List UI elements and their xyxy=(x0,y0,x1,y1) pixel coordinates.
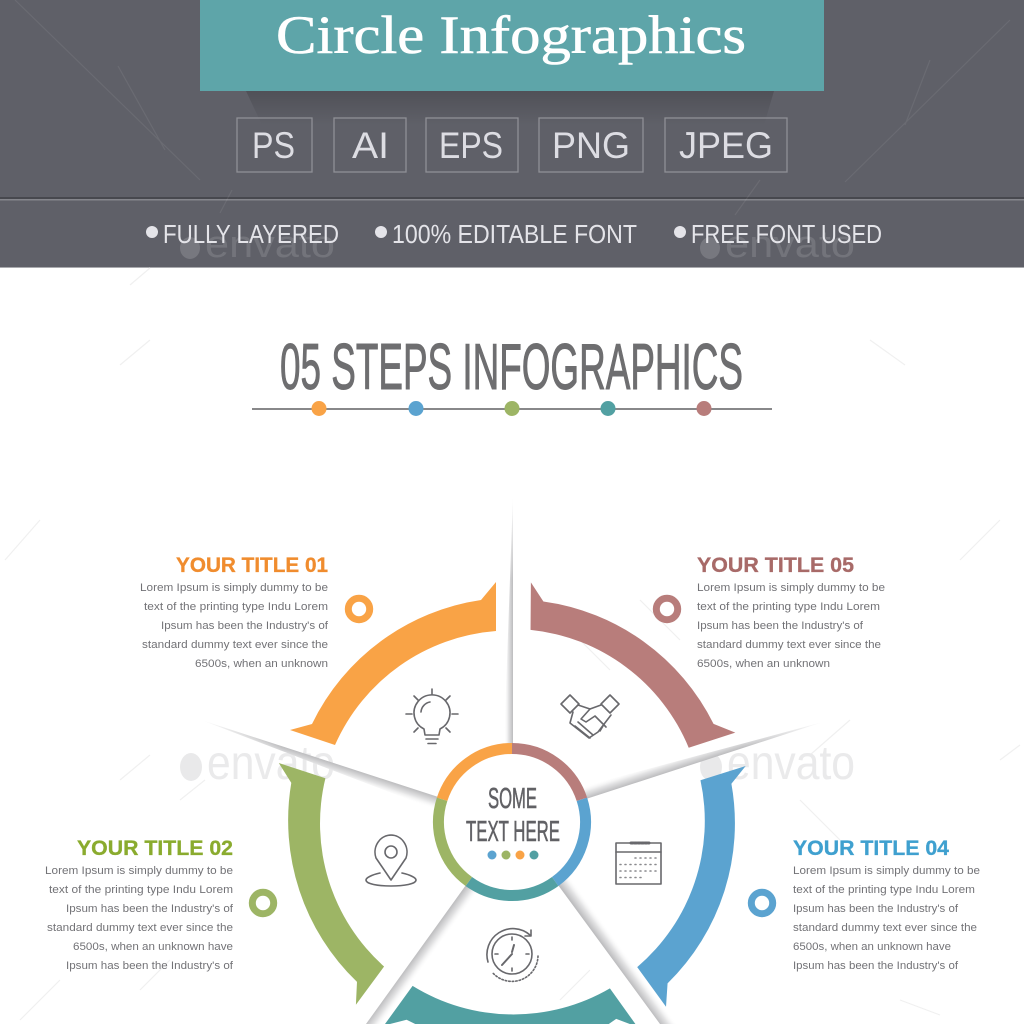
watermark: envato left: envato xyxy=(207,737,335,790)
header background xyxy=(0,0,1024,268)
body 01: Ipsum has been the Industry's of xyxy=(161,620,329,632)
body 02: Ipsum has been the Industry's of xyxy=(66,960,234,972)
body 01: text of the printing type Indu Lorem xyxy=(144,601,328,613)
title 01: YOUR TITLE 01 xyxy=(176,554,328,577)
body 04: Ipsum has been the Industry's of xyxy=(793,960,959,972)
banner title: Circle Infographics xyxy=(276,5,746,65)
format badges: JPEG xyxy=(679,125,773,166)
icon: clock with arrow xyxy=(487,929,538,981)
format badges: EPS xyxy=(439,125,503,166)
body 02 xyxy=(45,865,234,972)
body 01 xyxy=(140,582,329,670)
banner shadow xyxy=(246,91,774,125)
center text: TEXT HERE xyxy=(466,816,560,848)
body 01: Lorem Ipsum is simply dummy to be xyxy=(140,582,328,594)
body 02: Ipsum has been the Industry's of xyxy=(66,903,234,915)
center text: SOME xyxy=(488,783,537,815)
icon: location pin xyxy=(366,835,416,886)
center hub xyxy=(438,748,586,896)
ring marker 04 xyxy=(751,892,773,914)
step 02 text block xyxy=(45,837,234,972)
fold dividers xyxy=(197,495,823,1024)
body 01: 6500s, when an unknown xyxy=(195,658,328,670)
ring marker 02 xyxy=(252,892,274,914)
body 05: standard dummy text ever since the xyxy=(697,639,881,651)
arc arrow: step 05 rose xyxy=(517,537,735,783)
body 04: 6500s, when an unknown have xyxy=(793,941,951,953)
feature list: FREE FONT USED xyxy=(691,219,882,249)
arc arrow: step 02 green xyxy=(215,763,434,1009)
body 04: Lorem Ipsum is simply dummy to be xyxy=(793,865,980,877)
icon: light bulb xyxy=(406,689,458,744)
body 05: 6500s, when an unknown xyxy=(697,658,830,670)
body 05: Ipsum has been the Industry's of xyxy=(697,620,864,632)
body 02: standard dummy text ever since the xyxy=(47,922,233,934)
watermark: envato right: envato xyxy=(727,737,855,790)
body 04: Ipsum has been the Industry's of xyxy=(793,903,959,915)
ring marker 01 xyxy=(348,598,370,620)
body 02: text of the printing type Indu Lorem xyxy=(49,884,233,896)
title 05: YOUR TITLE 05 xyxy=(697,554,854,577)
body 02: 6500s, when an unknown have xyxy=(73,941,233,953)
watermark: header: envato xyxy=(205,224,335,266)
body 05 xyxy=(697,582,885,670)
format badges: AI xyxy=(352,125,389,166)
arc arrow: step 04 blue xyxy=(570,754,833,1007)
step 04 text block xyxy=(793,837,980,972)
step 05 text block xyxy=(697,554,885,670)
title 02: YOUR TITLE 02 xyxy=(77,837,233,860)
body 04: standard dummy text ever since the xyxy=(793,922,977,934)
arc arrow: step 03 teal xyxy=(385,986,635,1024)
body 04 xyxy=(793,865,980,972)
heading divider with dots xyxy=(252,401,772,416)
ring marker 05 xyxy=(656,598,678,620)
body 02: Lorem Ipsum is simply dummy to be xyxy=(45,865,233,877)
feature list: FULLY LAYERED xyxy=(163,219,339,249)
body 01: standard dummy text ever since the xyxy=(142,639,328,651)
format badges: PNG xyxy=(552,125,630,166)
watermark: header: envato xyxy=(725,224,855,266)
step 01 text block xyxy=(140,554,329,670)
body 05: Lorem Ipsum is simply dummy to be xyxy=(697,582,885,594)
format badges: PS xyxy=(252,125,295,166)
faint background lines xyxy=(5,268,1020,1024)
title 04: YOUR TITLE 04 xyxy=(793,837,949,860)
body 04: text of the printing type Indu Lorem xyxy=(793,884,975,896)
center text xyxy=(466,783,560,848)
format badges xyxy=(237,118,787,172)
feature list: 100% EDITABLE FONT xyxy=(392,219,637,249)
icon: handshake xyxy=(561,695,619,738)
watermark: header xyxy=(180,224,855,266)
title banner xyxy=(200,0,824,91)
icon: calendar xyxy=(616,843,661,884)
feature list xyxy=(146,219,882,249)
arc arrow: step 01 orange xyxy=(290,582,496,745)
body 05: text of the printing type Indu Lorem xyxy=(697,601,880,613)
center dots xyxy=(488,850,538,860)
